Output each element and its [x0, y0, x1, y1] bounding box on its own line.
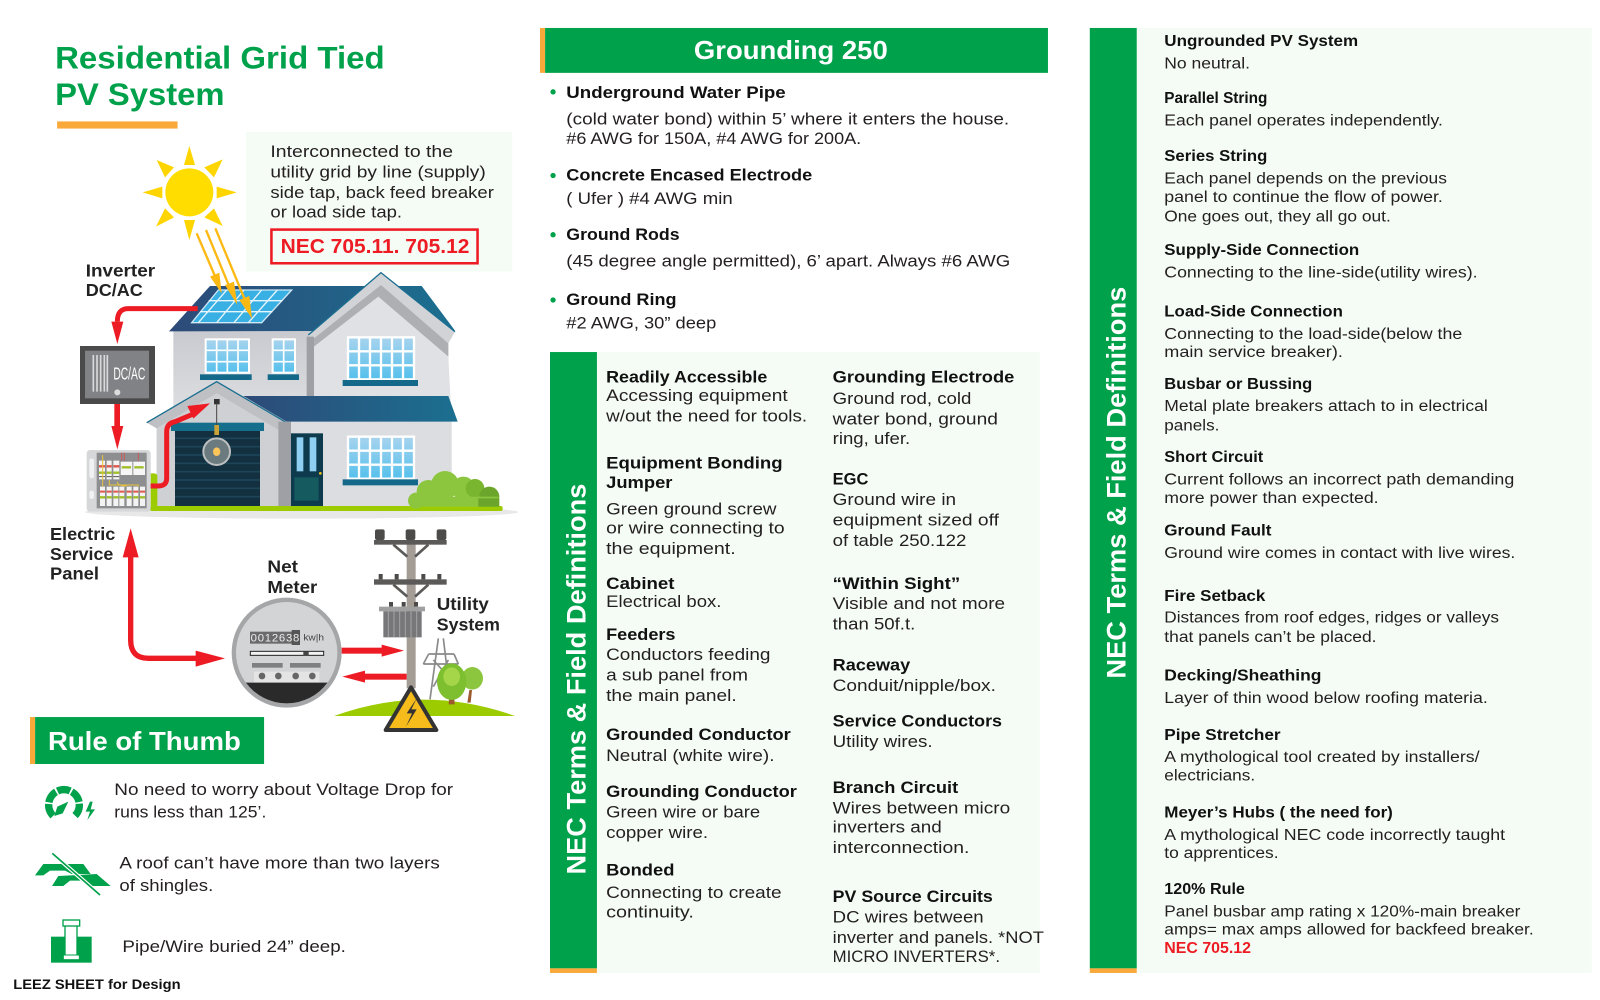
label: utility system: System: [437, 615, 500, 635]
callout: interconnection: or load side tap.: [270, 203, 402, 221]
term: grounding conductor: Grounding Conductor: [606, 782, 797, 801]
term: pipe stretcher: A mythological tool created by installers/: [1164, 749, 1480, 766]
label: utility system: [437, 594, 500, 635]
icon: buried pipe: [51, 920, 92, 963]
term: fire setback: [1164, 588, 1499, 646]
item: underground water pipe: Underground Water Pipe: [566, 83, 786, 102]
rule: burial depth: Pipe/Wire buried 24” deep.: [122, 938, 346, 956]
term: busbar or bussing: Metal plate breakers attach to in electrical: [1164, 398, 1488, 415]
term: load-side connection: main service breaker).: [1164, 344, 1343, 361]
term: bonded: Bonded: [606, 861, 674, 880]
term: short circuit: Short Circuit: [1164, 449, 1264, 466]
term: ground fault: Ground Fault: [1164, 523, 1272, 540]
term: decking/sheathing: Layer of thin wood below roofing materia.: [1164, 690, 1488, 707]
term: fire setback: Fire Setback: [1164, 588, 1266, 605]
label: net meter: Net: [267, 556, 298, 576]
term: 120% rule: amps= max amps allowed for backfeed breaker.: [1164, 922, 1534, 939]
term: grounding conductor: Green wire or bare: [606, 803, 760, 821]
solar panel: [192, 290, 292, 323]
term: grounded conductor: [606, 725, 791, 765]
utility pole: [374, 529, 447, 688]
arrows: meter and utility: [342, 645, 407, 683]
net meter: 0012638: [251, 632, 299, 644]
pylon: [423, 638, 458, 699]
panel: NEC terms right: NEC Terms & Field Definitions: [1102, 287, 1132, 679]
term: PV source circuits: MICRO INVERTERS*.: [833, 948, 1000, 966]
term: grounding electrode: Ground rod, cold: [833, 390, 971, 408]
term: series string: One goes out, they all go out.: [1164, 208, 1391, 225]
heading: grounding 250: [540, 28, 1048, 73]
term: 120% rule: 120% Rule: [1164, 881, 1245, 898]
term: load-side connection: Load-Side Connection: [1164, 303, 1343, 320]
icon: gauge: [49, 790, 95, 820]
callout: interconnection: NEC 705.11. 705.12: [281, 236, 469, 258]
term: grounding conductor: [606, 782, 797, 842]
term: pipe stretcher: electricians.: [1164, 768, 1255, 785]
rule: roof layers: of shingles.: [119, 877, 213, 895]
term: grounded conductor: Neutral (white wire).: [606, 747, 774, 765]
term: decking/sheathing: Decking/Sheathing: [1164, 668, 1321, 685]
term: raceway: Conduit/nipple/box.: [833, 677, 996, 695]
arrow: panel to inverter: [111, 309, 198, 344]
term: short circuit: Current follows an incorrect path demanding: [1164, 472, 1514, 489]
grounding list: [550, 83, 1010, 333]
icon: crossed roof: [35, 853, 111, 895]
item: ground ring: [550, 290, 716, 333]
term: branch circuit: interconnection.: [833, 839, 969, 857]
term: pipe stretcher: [1164, 727, 1480, 785]
label: electric service panel: [50, 524, 116, 584]
term: within sight: than 50f.t.: [833, 616, 915, 634]
item: ground ring: #2 AWG, 30” deep: [566, 315, 716, 333]
term: grounding electrode: [831, 368, 1014, 448]
term: bonded: Connecting to create: [606, 884, 782, 902]
term: PV source circuits: [833, 887, 1044, 966]
electric service panel: [87, 450, 157, 512]
term: load-side connection: Connecting to the load-side(below the: [1164, 326, 1462, 343]
title: [55, 39, 385, 112]
term: supply-side connection: Connecting to the line-side(utility wires).: [1164, 265, 1478, 282]
term: 120% rule: [1164, 881, 1534, 957]
term: grounding conductor: copper wire.: [606, 824, 708, 842]
arrow: inverter to panel: [111, 404, 123, 449]
item: ground rods: Ground Rods: [566, 225, 680, 244]
label: net meter: Meter: [267, 577, 318, 597]
callout: interconnection: Interconnected to the: [270, 143, 453, 161]
term: readily accessible: Accessing equipment: [606, 387, 788, 405]
term: within sight: “Within Sight”: [833, 574, 960, 593]
illustration: house with solar system: [80, 146, 518, 519]
rule: voltage drop: [49, 781, 454, 821]
heading: grounding 250: Grounding 250: [694, 37, 888, 65]
term: load-side connection: [1164, 303, 1462, 361]
term: 120% rule: NEC 705.12: [1164, 940, 1251, 957]
callout: interconnection: utility grid by line (supply): [270, 164, 486, 182]
light bulb: [203, 399, 230, 465]
term: series string: [1164, 148, 1447, 225]
term: fire setback: Distances from roof edges, ridges or valleys: [1164, 609, 1499, 626]
heading: rule of thumb: Rule of Thumb: [48, 728, 241, 756]
term: pipe stretcher: Pipe Stretcher: [1164, 727, 1281, 744]
term: EGC: EGC: [833, 470, 868, 489]
term: supply-side connection: [1164, 242, 1478, 282]
term: meyer's hubs: to apprentices.: [1164, 845, 1279, 862]
term: raceway: Raceway: [833, 655, 911, 674]
term: bonded: [606, 861, 782, 921]
term: PV source circuits: inverter and panels. *NOT: [833, 929, 1044, 947]
term: busbar or bussing: [1164, 376, 1488, 435]
term: readily accessible: Readily Accessible: [606, 368, 767, 387]
term: within sight: Visible and not more: [833, 595, 1005, 613]
term: branch circuit: Branch Circuit: [833, 778, 959, 797]
title: PV System: [55, 76, 224, 112]
item: concrete encased electrode: ( Ufer ) #4 AWG min: [566, 190, 733, 208]
heading: rule of thumb: [30, 717, 264, 764]
term: EGC: Ground wire in: [833, 491, 956, 509]
term: ungrounded PV system: No neutral.: [1164, 55, 1250, 72]
rule: voltage drop: No need to worry about Voltage Drop for: [114, 781, 454, 799]
term: grounded conductor: Grounded Conductor: [606, 725, 791, 744]
label: electric service panel: Service: [50, 544, 114, 564]
credit: LEEZ SHEET for Design: [13, 977, 181, 993]
term: raceway: [833, 655, 996, 695]
item: ground rods: (45 degree angle permitted), 6’ apart. Always #6 AWG: [566, 252, 1010, 270]
label: net meter: [267, 556, 318, 597]
house: [147, 273, 458, 507]
term: equipment bonding jumper: Equipment Bonding: [606, 453, 783, 472]
illustration: grid connection: [123, 528, 515, 730]
arrow: meter to service panel: [123, 528, 225, 667]
term: short circuit: more power than expected.: [1164, 490, 1379, 507]
warning sign: [386, 687, 436, 730]
term: ungrounded PV system: [1164, 33, 1358, 72]
bush: [408, 471, 499, 509]
rule: roof layers: A roof can’t have more than two layers: [119, 854, 440, 872]
term: 120% rule: Panel busbar amp rating x 120%-main breaker: [1164, 903, 1520, 920]
item: underground water pipe: #6 AWG for 150A, #4 AWG for 200A.: [566, 130, 861, 148]
trees: [437, 663, 483, 704]
term: supply-side connection: Supply-Side Connection: [1164, 242, 1359, 259]
term: feeders: the main panel.: [606, 687, 737, 705]
term: parallel string: Each panel operates independently.: [1164, 113, 1443, 130]
net meter: [232, 598, 342, 708]
term: EGC: [833, 470, 1000, 550]
front door: [291, 433, 323, 506]
term: parallel string: Parallel String: [1164, 90, 1267, 107]
panel: NEC terms right: [1090, 28, 1592, 973]
item: underground water pipe: (cold water bond) within 5’ where it enters the house.: [566, 110, 1009, 128]
term: series string: Series String: [1164, 148, 1267, 165]
term: cabinet: Electrical box.: [606, 593, 721, 611]
term: PV source circuits: PV Source Circuits: [833, 887, 993, 906]
term: equipment bonding jumper: Jumper: [606, 473, 673, 492]
garage door: [171, 423, 264, 508]
label: inverter: Inverter: [86, 261, 155, 281]
term: feeders: a sub panel from: [606, 667, 748, 685]
item: concrete encased electrode: [550, 166, 812, 208]
term: grounding electrode: water bond, ground: [831, 410, 998, 428]
title underline: [57, 121, 178, 129]
green ground strip: [150, 506, 503, 511]
label: electric service panel: Electric: [50, 524, 116, 544]
net meter: kw|h: [303, 632, 324, 642]
rule: burial depth: [51, 920, 346, 963]
term: equipment bonding jumper: or wire connecting to: [606, 520, 785, 538]
term: grounding electrode: Grounding Electrode: [833, 368, 1014, 387]
term: feeders: Conductors feeding: [606, 646, 770, 664]
item: ground rods: [550, 225, 1010, 270]
term: series string: Each panel depends on the previous: [1164, 171, 1447, 188]
term: equipment bonding jumper: the equipment.: [606, 540, 736, 558]
inverter: DC/AC: [113, 364, 145, 384]
term: grounding electrode: ring, ufer.: [833, 430, 910, 448]
title: Residential Grid Tied: [55, 39, 385, 75]
term: branch circuit: [833, 778, 1010, 857]
ground shadow: [85, 505, 518, 519]
term: service conductors: Service Conductors: [833, 712, 1002, 731]
term: within sight: [833, 574, 1005, 634]
label: inverter: DC/AC: [86, 280, 143, 300]
term: ground fault: [1164, 523, 1515, 562]
term: cabinet: Cabinet: [606, 574, 675, 593]
term: busbar or bussing: panels.: [1164, 418, 1219, 435]
term: EGC: equipment sized off: [833, 512, 1000, 530]
term: equipment bonding jumper: Green ground screw: [606, 500, 777, 518]
term: PV source circuits: DC wires between: [833, 908, 984, 926]
arrow: panel to house: [151, 403, 210, 486]
term: cabinet: [606, 574, 721, 611]
term: service conductors: [833, 712, 1002, 751]
callout: interconnection: side tap, back feed breaker: [270, 184, 495, 202]
sun: [143, 146, 237, 240]
panel: NEC terms middle: NEC Terms & Field Definitions: [562, 484, 592, 874]
term: meyer's hubs: A mythological NEC code incorrectly taught: [1164, 827, 1506, 844]
term: ungrounded PV system: Ungrounded PV System: [1164, 33, 1358, 50]
rule: roof layers: [35, 853, 440, 895]
hill: [334, 700, 515, 716]
label: utility system: Utility: [437, 594, 489, 614]
term: branch circuit: Wires between micro: [833, 799, 1010, 817]
item: ground ring: Ground Ring: [566, 290, 677, 309]
arrows: sunlight: [197, 228, 252, 319]
term: fire setback: that panels can’t be placed.: [1164, 629, 1377, 646]
term: ground fault: Ground wire comes in contact with live wires.: [1164, 545, 1515, 562]
item: concrete encased electrode: Concrete Encased Electrode: [566, 166, 812, 185]
windows: [200, 337, 418, 485]
label: inverter: [86, 261, 155, 300]
term: feeders: [606, 625, 770, 705]
callout: interconnection: [246, 132, 512, 271]
term: bonded: continuity.: [606, 903, 694, 921]
term: short circuit: [1164, 449, 1514, 507]
term: readily accessible: [605, 368, 807, 425]
term: meyer's hubs: Meyer’s Hubs ( the need for): [1164, 804, 1393, 821]
term: readily accessible: w/out the need for tools.: [605, 407, 807, 425]
term: decking/sheathing: [1164, 668, 1488, 707]
term: feeders: Feeders: [606, 625, 676, 644]
term: equipment bonding jumper: [606, 453, 785, 558]
term: branch circuit: inverters and: [833, 819, 942, 837]
label: electric service panel: Panel: [50, 564, 99, 584]
term: EGC: of table 250.122: [833, 532, 966, 550]
panel: NEC terms middle: [550, 352, 1044, 973]
inverter: [80, 346, 155, 404]
term: parallel string: [1164, 90, 1443, 130]
rule: voltage drop: runs less than 125’.: [114, 803, 266, 821]
item: underground water pipe: [550, 83, 1009, 148]
term: meyer's hubs: [1164, 804, 1506, 862]
term: series string: panel to continue the flow of power.: [1164, 189, 1443, 206]
term: busbar or bussing: Busbar or Bussing: [1164, 376, 1312, 393]
term: service conductors: Utility wires.: [833, 733, 933, 751]
